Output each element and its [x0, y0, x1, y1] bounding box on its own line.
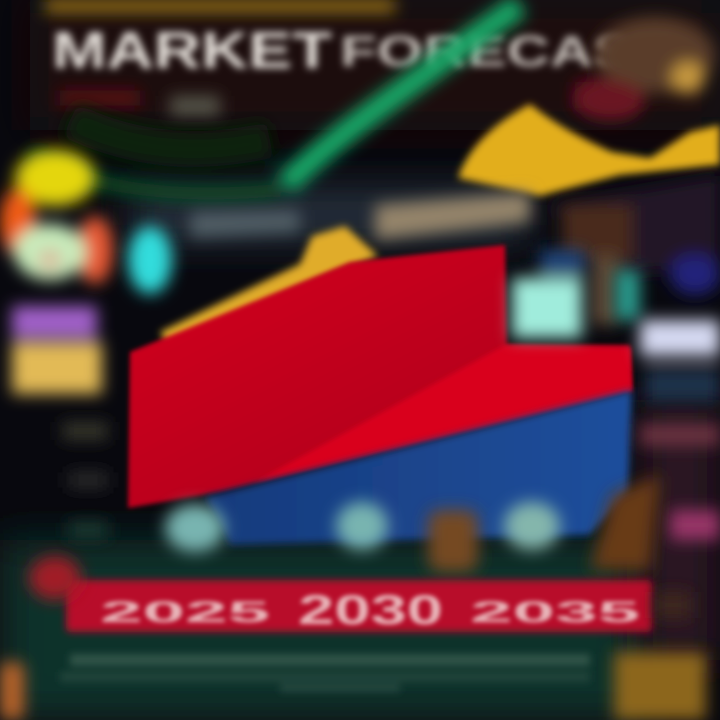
- title: MARKET: [52, 22, 332, 80]
- top right decor: [576, 17, 715, 120]
- right dark building: [550, 175, 720, 325]
- light band above chart: [190, 192, 530, 240]
- title: [52, 22, 670, 80]
- right side panels: [640, 320, 720, 540]
- cyan icon: [128, 226, 172, 294]
- red area: [128, 245, 632, 508]
- bright red band: [255, 345, 632, 482]
- chart right inset icons: [512, 250, 640, 338]
- red banner: [29, 556, 652, 633]
- area chart: [128, 245, 632, 545]
- title: FORECAST: [340, 27, 670, 76]
- footer text: [60, 654, 590, 692]
- top gold banner: [45, 0, 395, 12]
- banner labels: 2035: [470, 596, 640, 629]
- banner labels: 2025: [100, 596, 270, 629]
- left colour wheel: [0, 150, 113, 284]
- bottom right gold: [614, 592, 706, 720]
- left small rows: [62, 422, 108, 538]
- gold pile: [458, 104, 720, 196]
- bottom left orange tab: [0, 662, 24, 720]
- gold edge on chart: [160, 226, 378, 350]
- left gold card: [12, 306, 102, 394]
- banner labels: 2030: [298, 586, 443, 633]
- green trend arrow: [30, 5, 520, 193]
- banner labels: [100, 586, 640, 633]
- subtitle: [60, 82, 635, 116]
- axis bubbles: [165, 475, 660, 572]
- blue area: [205, 390, 632, 545]
